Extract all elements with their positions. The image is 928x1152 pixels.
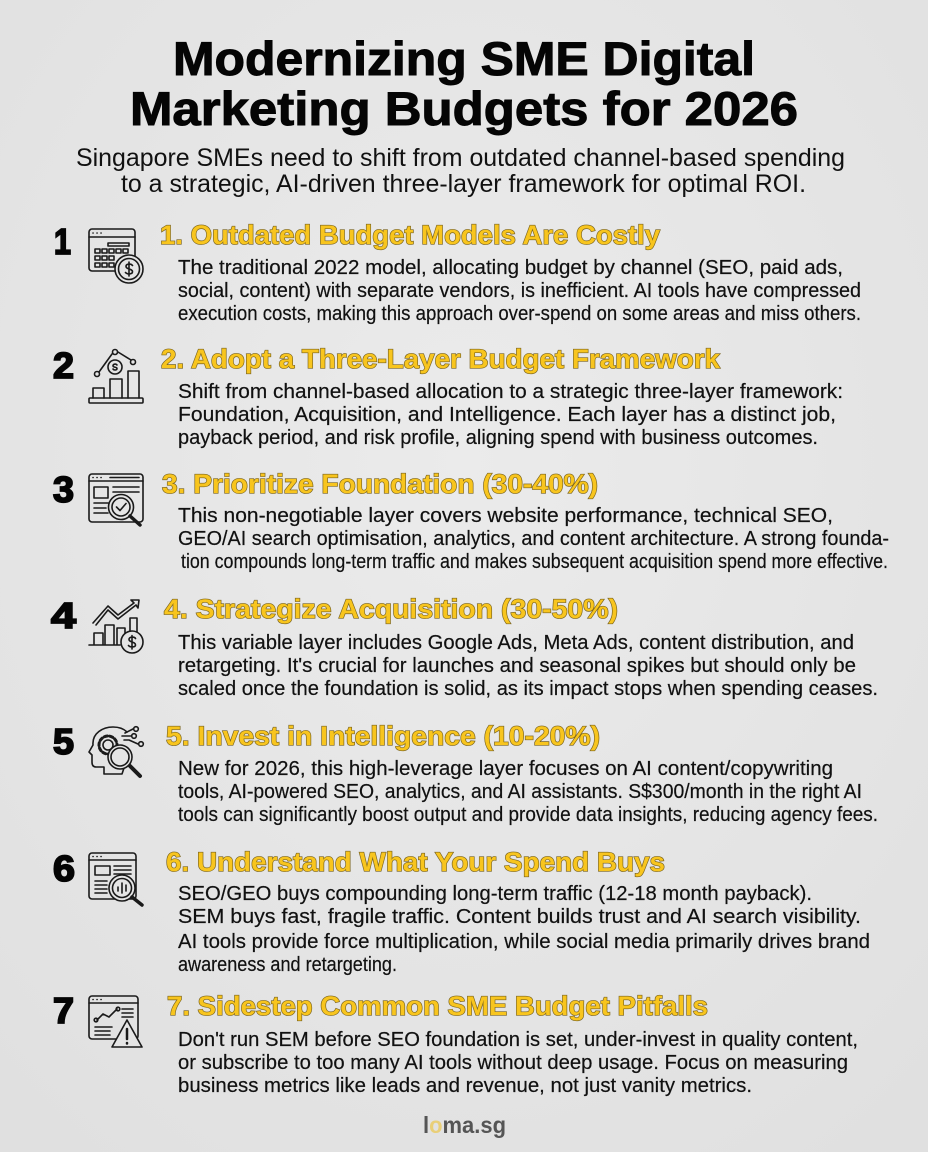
heading 2: 2. Adopt a Three-Layer Budget Framework — [161, 344, 721, 374]
body text 1: The traditional 2022 model, allocating budget by channel (SEO, paid ads, — [178, 257, 843, 279]
body text 2 — [178, 381, 843, 449]
body text 5: tools can significantly boost output and provide data insights, reducing agency fees. — [178, 804, 878, 826]
body text 7: Don't run SEM before SEO foundation is set, under-invest in quality content, — [178, 1029, 858, 1051]
title — [130, 32, 798, 135]
body text 4: retargeting. It's crucial for launches and seasonal spikes but should only be — [178, 655, 856, 677]
body text 3 — [178, 505, 889, 573]
body text 7 — [178, 1029, 858, 1097]
panel: step 6 — [53, 847, 870, 976]
subtitle: Singapore SMEs need to shift from outdated channel-based spending — [76, 144, 845, 172]
body text 1: social, content) with separate vendors, is inefficient. AI tools have compressed — [178, 280, 861, 302]
body text 5: New for 2026, this high-leverage layer focuses on AI content/copywriting — [178, 758, 833, 780]
panel: step 3 — [53, 469, 889, 573]
icon: growth chart with coin — [89, 600, 143, 653]
title: Modernizing SME Digital — [173, 32, 755, 85]
heading 1: 1. Outdated Budget Models Are Costly — [160, 220, 660, 250]
body text 6: awareness and retargeting. — [178, 954, 397, 976]
number 4: 4 — [51, 595, 76, 636]
number 2: 2 — [53, 345, 74, 386]
title: Marketing Budgets for 2026 — [130, 82, 798, 135]
body text 6: SEM buys fast, fragile traffic. Content builds trust and AI search visibility. — [178, 906, 861, 928]
icon: bar chart with coin — [89, 350, 143, 403]
panel: step 5 — [53, 721, 878, 826]
body text 3: GEO/AI search optimisation, analytics, and content architecture. A strong founda- — [178, 528, 889, 550]
heading 6: 6. Understand What Your Spend Buys — [166, 847, 665, 877]
logo: loma.sg: loma.sg — [423, 1112, 506, 1138]
body text 3: This non-negotiable layer covers website performance, technical SEO, — [178, 505, 833, 527]
icon: head with gear and magnifier — [89, 727, 143, 776]
heading 5: 5. Invest in Intelligence (10-20%) — [166, 721, 600, 751]
number 5: 5 — [53, 721, 74, 762]
body text 6 — [178, 883, 870, 976]
subtitle: to a strategic, AI-driven three-layer framework for optimal ROI. — [121, 170, 806, 198]
heading 4: 4. Strategize Acquisition (30-50%) — [164, 594, 618, 624]
body text 7: or subscribe to too many AI tools without deep usage. Focus on measuring — [178, 1052, 848, 1074]
panel: step 1 — [54, 220, 861, 325]
heading 7: 7. Sidestep Common SME Budget Pitfalls — [167, 991, 708, 1021]
body text 2: payback period, and risk profile, aligning spend with business outcomes. — [178, 427, 818, 449]
heading 3: 3. Prioritize Foundation (30-40%) — [162, 469, 598, 499]
body text 7: business metrics like leads and revenue, not just vanity metrics. — [178, 1075, 752, 1097]
number 7: 7 — [53, 990, 74, 1031]
body text 6: SEO/GEO buys compounding long-term traffic (12-18 month payback). — [178, 883, 812, 905]
number 1: 1 — [54, 221, 71, 262]
icon: web page with magnifier check — [89, 474, 143, 525]
body text 1 — [178, 257, 861, 325]
panel: step 2 — [53, 344, 843, 449]
body text 2: Shift from channel-based allocation to a strategic three-layer framework: — [178, 381, 843, 403]
icon: budget calendar with coin — [89, 229, 143, 283]
number 6: 6 — [53, 848, 75, 889]
body text 6: AI tools provide force multiplication, while social media primarily drives brand — [178, 931, 870, 953]
panel: step 7 — [53, 990, 858, 1097]
body text 4: scaled once the foundation is solid, as its impact stops when spending ceases. — [178, 678, 878, 700]
body text 5 — [178, 758, 878, 826]
body text 1: execution costs, making this approach over-spend on some areas and miss others. — [178, 303, 861, 325]
body text 5: tools, AI-powered SEO, analytics, and AI assistants. S$300/month in the right AI — [178, 781, 862, 803]
body text 4: This variable layer includes Google Ads, Meta Ads, content distribution, and — [178, 632, 854, 654]
body text 4 — [178, 632, 878, 700]
subtitle — [76, 144, 845, 198]
panel: step 4 — [51, 594, 878, 700]
icon: report with magnifier — [89, 853, 142, 905]
number 3: 3 — [53, 469, 74, 510]
body text 2: Foundation, Acquisition, and Intelligence. Each layer has a distinct job, — [178, 404, 836, 426]
icon: analytics window with warning — [89, 996, 142, 1047]
